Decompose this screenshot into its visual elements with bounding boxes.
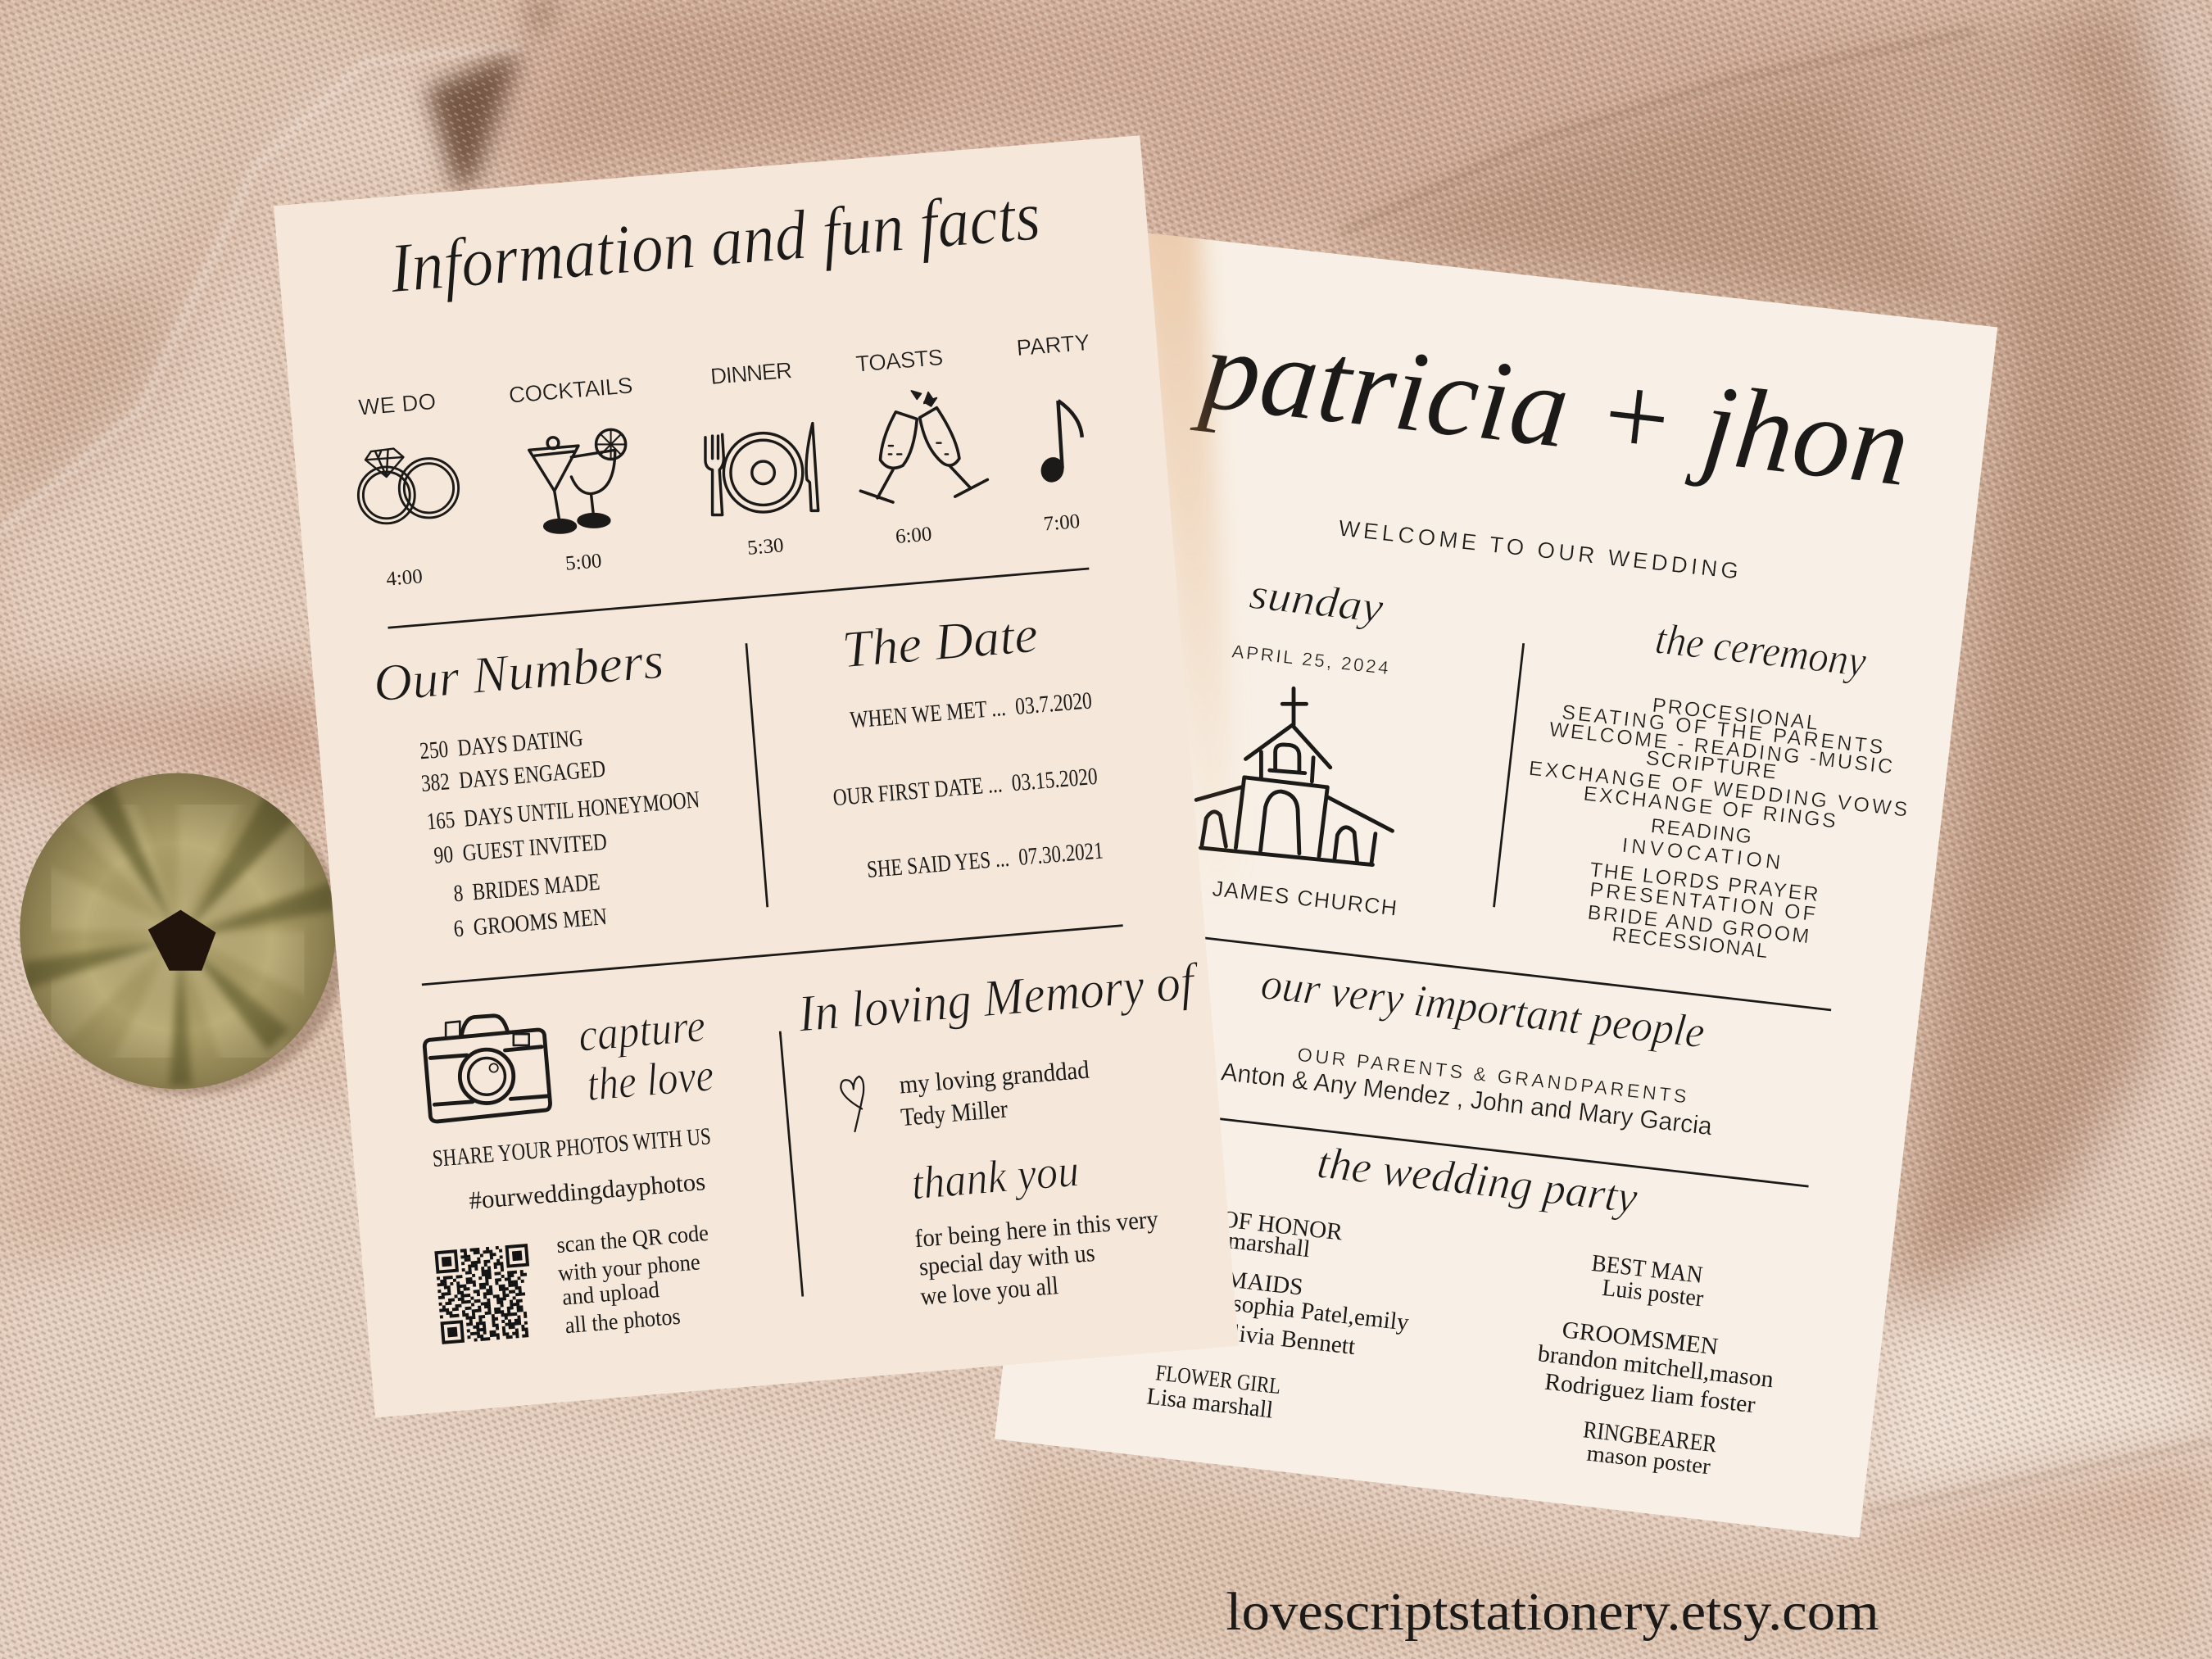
thank you script: thank you [909,1145,1081,1210]
thank you message [913,1204,1159,1311]
thank you message: we love you all [919,1271,1059,1311]
memorial text: Tedy Miller [900,1094,1009,1131]
bridal side: FLOWER GIRL [1154,1359,1282,1398]
ceremony order list: INVOCATION [1620,834,1784,874]
hashtag: #ourweddingdayphotos [468,1167,706,1215]
timeline labels: COCKTAILS [508,372,633,408]
parents label: OUR PARENTS & GRANDPARENTS [1296,1044,1690,1108]
dates list: SHE SAID YES ... 07.30.2021 [866,837,1104,883]
icon: camera [424,1016,551,1122]
bridal side: Ana sophia Patel,emily [1185,1285,1411,1336]
divider: vertical [780,1031,803,1296]
timeline labels: DINNER [709,357,793,389]
timeline times: 5:00 [564,550,602,575]
icon: cocktails [529,429,626,533]
numbers list: 90 GUEST INVITED [433,829,608,869]
bridal side: Lisa marshall [1180,1222,1312,1262]
parents names: Anton & Any Mendez , John and Mary Garcia [1220,1057,1714,1140]
thank you message: special day with us [918,1238,1096,1281]
ceremony order list: READING [1650,814,1755,849]
numbers list: 8 BRIDES MADE [452,869,601,907]
icon: place setting [705,424,818,515]
groom side [1536,1250,1775,1479]
divider [422,926,1123,985]
icon: church [1196,688,1393,865]
memorial text [898,1055,1090,1131]
icon: rings [358,449,459,524]
numbers list: 6 GROOMS MEN [452,904,608,942]
timeline labels: PARTY [1016,329,1090,360]
groom side: BEST MAN [1590,1250,1704,1289]
divider [388,569,1089,628]
important people heading: our very important people [1258,958,1707,1058]
groom side: Luis poster [1601,1275,1705,1312]
numbers list: 250 DAYS DATING [419,725,584,764]
divider: vertical [1494,643,1524,907]
panel: information card [274,135,1239,1418]
bridal side: MAID OF HONOR [1150,1199,1344,1246]
timeline times: 4:00 [385,565,424,591]
bridal side: olivia Bennett [1219,1319,1357,1360]
ceremony order list: RECESSIONAL [1611,922,1770,963]
thank you message: for being here in this very [913,1204,1159,1253]
dates list [832,687,1104,883]
ceremony order list: PROCESIONAL [1651,694,1820,735]
groom side: Rodriguez liam foster [1543,1369,1756,1418]
groom side: GROOMSMEN [1561,1317,1720,1360]
numbers list [419,725,700,942]
capture the love script: the love [585,1049,716,1111]
timeline labels: TOASTS [854,344,944,377]
dates list: OUR FIRST DATE ... 03.15.2020 [832,764,1099,811]
panel: wedding program card [995,231,1997,1538]
numbers list: 165 DAYS UNTIL HONEYMOON [426,786,700,835]
bridal side: Lisa marshall [1145,1383,1274,1424]
welcome line: WELCOME TO OUR WEDDING [1337,515,1743,584]
dates list: WHEN WE MET ... 03.7.2020 [849,687,1093,733]
capture the love script: capture [577,999,707,1062]
ceremony heading: the ceremony [1653,614,1869,686]
icon: sea urchin [20,773,347,1095]
bridal side: BRIDESMAIDS [1140,1257,1304,1301]
divider [1157,932,1831,1010]
QR instructions: all the photos [564,1304,682,1339]
bridal side [1140,1199,1411,1424]
timeline times [385,510,1081,591]
icon: champagne toast [860,391,987,502]
groom side: brandon mitchell,mason [1536,1340,1775,1393]
ceremony order list: EXCHANGE OF WEDDING VOWS [1528,757,1911,822]
ceremony order list: EXCHANGE OF RINGS [1582,782,1838,833]
memory heading: In loving Memory of [796,952,1202,1043]
our numbers heading: Our Numbers [371,631,666,713]
QR instructions: with your phone [557,1249,701,1286]
ceremony order list: WELCOME - READING -MUSIC [1548,718,1896,778]
QR instructions: and upload [561,1277,660,1311]
QR instructions [555,1221,709,1339]
timeline times: 6:00 [895,523,932,548]
QR code [434,1244,535,1344]
divider [1157,1112,1809,1186]
numbers list: 382 DAYS ENGAGED [420,756,606,797]
ceremony order list: SCRIPTURE [1645,746,1779,784]
timeline labels: WE DO [357,388,437,420]
capture the love script [577,999,716,1111]
timeline times: 5:30 [746,534,785,560]
shadow of front card [1148,233,1229,818]
ceremony order list: THE LORDS PRAYER [1589,858,1821,906]
information title: Information and fun facts [386,176,1043,307]
timeline labels [357,329,1090,420]
divider: vertical [746,643,768,907]
ceremony order list [1528,694,1911,963]
icon: music note [1037,401,1082,486]
ceremony order list: SEATING OF THE PARENTS [1561,700,1886,759]
icon: heart [841,1077,863,1131]
venue: JAMES CHURCH [1211,876,1400,921]
share text: SHARE YOUR PHOTOS WITH US [432,1123,712,1172]
groom side: mason poster [1585,1440,1711,1479]
wedding party heading: the wedding party [1315,1137,1640,1222]
ceremony order list: PRESENTATION OF [1589,878,1818,926]
date: APRIL 25, 2024 [1231,641,1392,678]
names heading: patricia + jhon [1189,303,1915,510]
QR instructions: scan the QR code [555,1221,709,1258]
groom side: RINGBEARER [1582,1416,1718,1457]
the date heading: The Date [840,605,1040,678]
day script: sunday [1247,569,1386,632]
ceremony order list: BRIDE AND GROOM [1586,901,1812,948]
timeline times: 7:00 [1043,510,1081,536]
shop URL watermark: lovescriptstationery.etsy.com [1226,1583,1879,1642]
memorial text: my loving granddad [898,1055,1090,1099]
